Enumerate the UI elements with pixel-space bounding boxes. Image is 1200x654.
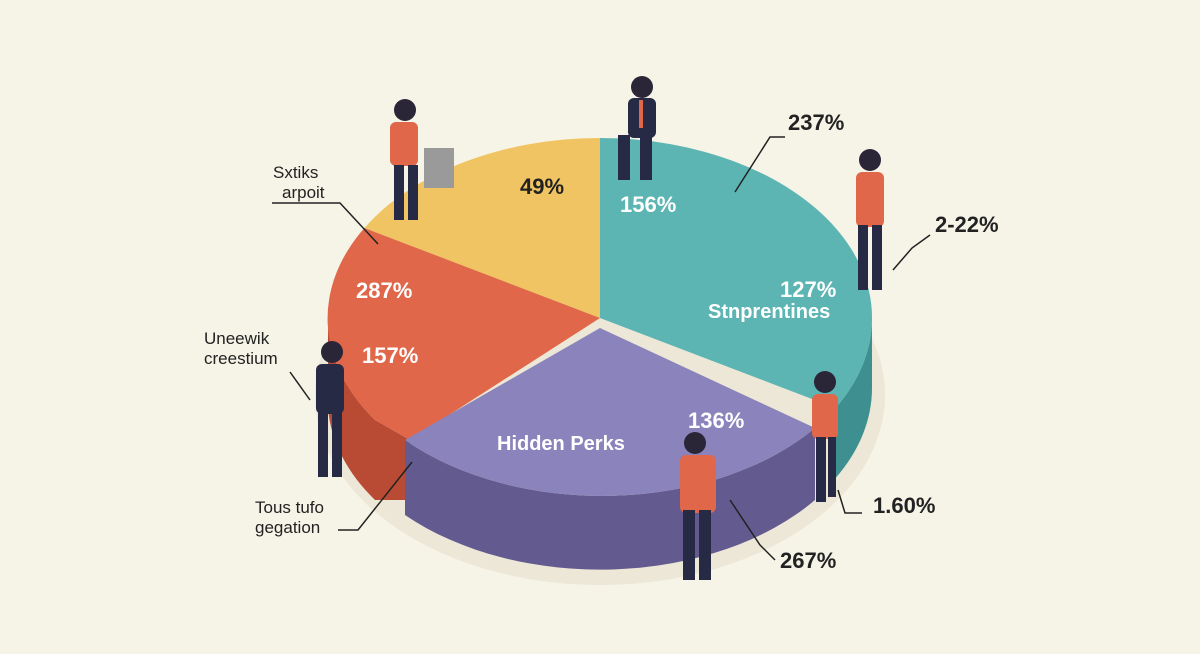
slice: teal side bbox=[836, 318, 872, 478]
leader lines bbox=[272, 137, 930, 560]
slice: teal top bbox=[600, 138, 872, 408]
percentage labels: Stnprentines bbox=[708, 301, 830, 323]
person woman left bbox=[390, 99, 454, 220]
percentage labels: 49% bbox=[520, 174, 564, 199]
percentage labels: 237% bbox=[788, 110, 844, 135]
side labels: Uneewik bbox=[204, 329, 270, 348]
percentage labels: 1.60% bbox=[873, 493, 935, 518]
side labels: creestium bbox=[204, 349, 278, 368]
percentage labels bbox=[356, 110, 999, 573]
slice: red top bbox=[328, 228, 600, 440]
person right top bbox=[856, 149, 884, 290]
slice: purple bbox=[405, 328, 815, 570]
shadow ellipse bbox=[315, 205, 885, 585]
side labels: Tous tufo bbox=[255, 498, 324, 517]
person left bbox=[316, 341, 344, 477]
percentage labels: 267% bbox=[780, 548, 836, 573]
person right woman bbox=[812, 371, 838, 502]
people bbox=[316, 76, 884, 580]
percentage labels: 136% bbox=[688, 408, 744, 433]
percentage labels: Hidden Perks bbox=[497, 433, 625, 455]
slice: yellow top bbox=[364, 138, 600, 318]
person bottom bbox=[680, 432, 716, 580]
person top bbox=[618, 76, 656, 180]
percentage labels: 2-22% bbox=[935, 212, 999, 237]
percentage labels: 287% bbox=[356, 278, 412, 303]
side labels bbox=[204, 163, 325, 537]
side labels: arpoit bbox=[282, 183, 325, 202]
percentage labels: 127% bbox=[780, 277, 836, 302]
percentage labels: 157% bbox=[362, 343, 418, 368]
percentage labels: 156% bbox=[620, 192, 676, 217]
side labels: Sxtiks bbox=[273, 163, 318, 182]
slice: red side bbox=[328, 318, 410, 500]
side labels: gegation bbox=[255, 518, 320, 537]
